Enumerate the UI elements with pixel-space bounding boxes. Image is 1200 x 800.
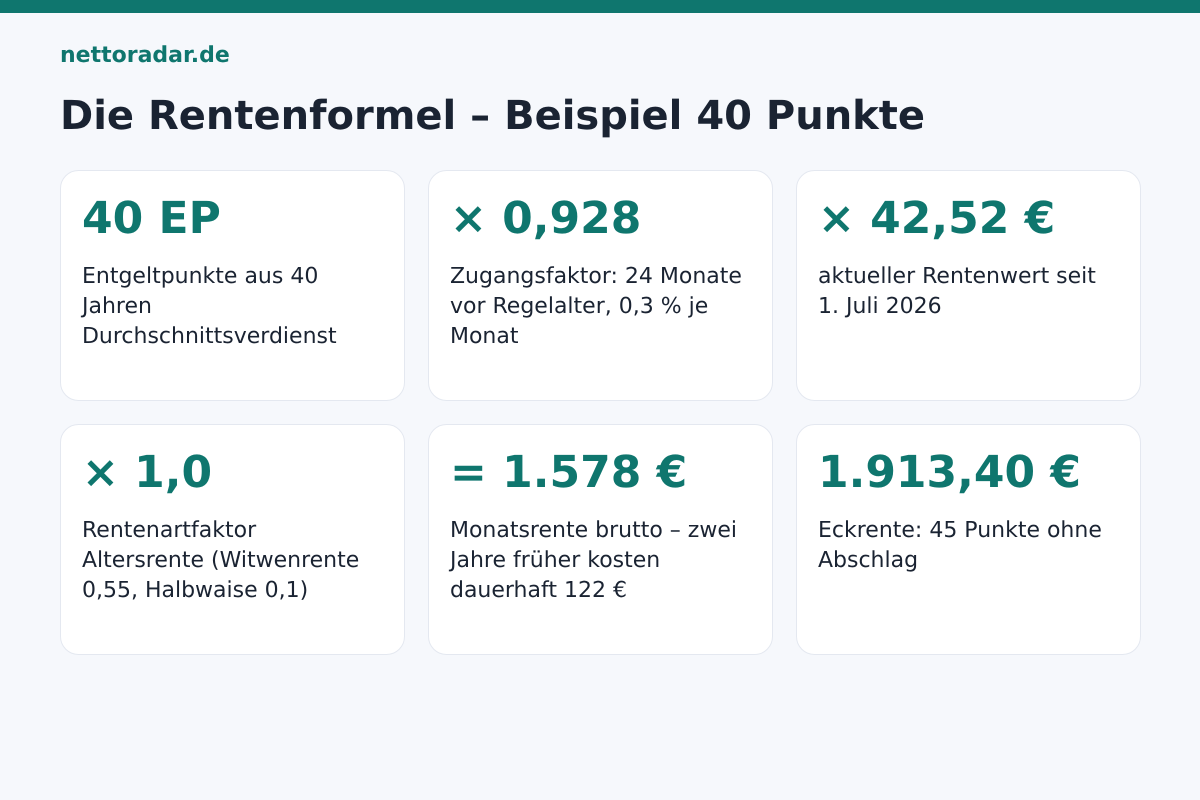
description: Monatsrente: Monatsrente brutto – zwei xyxy=(450,518,737,543)
panel: Monatsrente xyxy=(428,424,772,654)
description: Rentenwert: 1. Juli 2026 xyxy=(818,294,942,319)
description: Entgeltpunkte: Entgeltpunkte aus 40 xyxy=(82,264,318,289)
description: Zugangsfaktor: vor Regelalter, 0,3 % je xyxy=(450,294,708,319)
description: Eckrente: Abschlag xyxy=(818,548,918,573)
description: Entgeltpunkte: Durchschnittsverdienst xyxy=(82,324,337,349)
description: Eckrente: Eckrente: 45 Punkte ohne xyxy=(818,518,1102,543)
brand name: nettoradar.de xyxy=(60,43,230,68)
description: Zugangsfaktor: Zugangsfaktor: 24 Monate xyxy=(450,264,742,289)
description: Rentenartfaktor: Rentenartfaktor xyxy=(82,518,257,543)
description: Rentenartfaktor: 0,55, Halbwaise 0,1) xyxy=(82,578,308,603)
description: Monatsrente: dauerhaft 122 € xyxy=(450,578,627,603)
description: Zugangsfaktor: Monat xyxy=(450,324,519,349)
value: 1,0: × 1,0 xyxy=(82,447,212,498)
description: Rentenwert: aktueller Rentenwert seit xyxy=(818,264,1096,289)
panel: Zugangsfaktor xyxy=(428,170,772,400)
description: Rentenartfaktor: Altersrente (Witwenrente xyxy=(82,548,359,573)
description: Monatsrente: Jahre früher kosten xyxy=(448,548,660,573)
description: Entgeltpunkte: Jahren xyxy=(80,294,152,319)
title: Die Rentenformel – Beispiel 40 Punkte xyxy=(60,93,925,139)
panel: Entgeltpunkte xyxy=(60,170,404,400)
panel: Rentenartfaktor xyxy=(60,424,404,654)
panel: Rentenwert xyxy=(796,170,1140,400)
value: 42,52 €: × 42,52 € xyxy=(818,193,1055,244)
value: 1.578 €: = 1.578 € xyxy=(450,447,687,498)
value: 0,928: × 0,928 xyxy=(450,193,641,244)
top accent bar xyxy=(0,0,1200,13)
value: 1.913,40 €: 1.913,40 € xyxy=(818,447,1081,498)
panel: Eckrente xyxy=(796,424,1140,654)
value: 40 EP: 40 EP xyxy=(82,193,221,244)
